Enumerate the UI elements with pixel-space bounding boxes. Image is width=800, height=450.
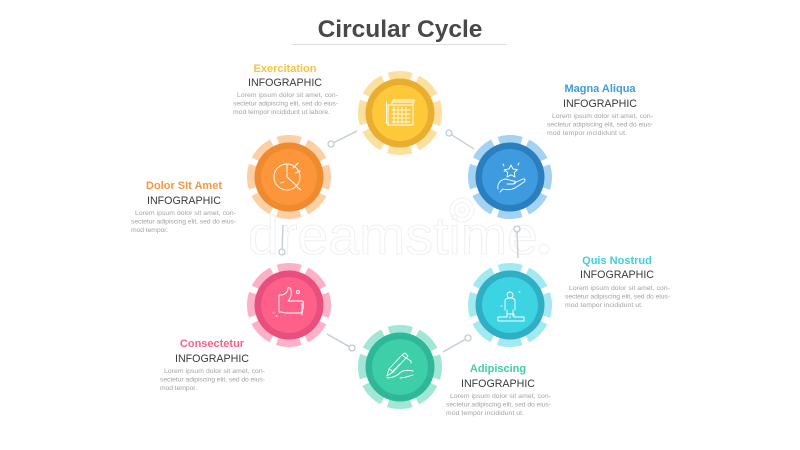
text block: Exercitation: INFOGRAPHIC — [248, 77, 322, 89]
text block: Dolor Sit Amet: Lorem ipsum dolor sit amet, con- — [135, 210, 236, 217]
text block: Consectetur: Consectetur — [180, 338, 245, 350]
text block: Adipiscing: Lorem ipsum dolor sit amet, con- — [450, 393, 551, 400]
connector: pink to mint — [327, 334, 355, 351]
text block: Adipiscing: sectetur adipiscing elit, sed do eius- — [446, 402, 551, 408]
icon: pie chart — [274, 163, 301, 190]
connector: orange to pink — [279, 225, 285, 255]
text block: Adipiscing: mod tempor incididunt ut. — [446, 410, 524, 417]
title: Circular Cycle — [318, 16, 482, 43]
text block: Quis Nostrud: sectetur adipiscing elit, sed do eius- — [565, 294, 670, 300]
text block: Quis Nostrud: Lorem ipsum dolor sit amet, con- — [569, 285, 670, 292]
icon: hand writing — [387, 353, 413, 378]
text block: Dolor Sit Amet — [131, 180, 236, 234]
text block: Adipiscing: INFOGRAPHIC — [461, 378, 535, 390]
text block: Adipiscing: Adipiscing — [470, 363, 526, 375]
connector: yellow to blue — [446, 130, 474, 149]
text block: Dolor Sit Amet: sectetur adipiscing elit, sed do eius- — [131, 218, 236, 226]
text block: Exercitation: mod tempor incididunt ut labore. — [233, 109, 330, 116]
text block: Adipiscing — [446, 363, 551, 417]
icon: thumbs up — [273, 288, 304, 316]
text block: Exercitation: Lorem ipsum dolor sit amet, con- — [237, 92, 338, 99]
gear: mint — [362, 329, 438, 405]
text block: Magna Aliqua: mod tempor incididunt ut. — [547, 130, 627, 137]
text block: Consectetur: sectetur adipiscing elit, sed do eius- — [160, 376, 265, 384]
text block: Exercitation — [233, 63, 338, 116]
text block: Magna Aliqua: INFOGRAPHIC — [563, 98, 637, 110]
text block: Quis Nostrud: Quis Nostrud — [582, 255, 652, 267]
text block: Exercitation: sectetur adipiscing elit, sed do eius- — [233, 100, 338, 108]
text block: Consectetur: INFOGRAPHIC — [175, 353, 249, 365]
text block: Dolor Sit Amet: INFOGRAPHIC — [147, 195, 221, 207]
gear: orange — [251, 139, 327, 215]
gear: yellow — [362, 75, 438, 151]
text block: Dolor Sit Amet: Dolor SIt Amet — [146, 180, 222, 192]
icon: calendar — [386, 100, 414, 125]
text block: Consectetur — [160, 338, 265, 392]
text block: Exercitation: Exercitation — [254, 63, 317, 75]
connector: blue to cyan — [514, 226, 520, 258]
text block: Dolor Sit Amet: mod tempor. — [131, 227, 168, 234]
watermark: dreamstime — [248, 206, 538, 266]
gear: pink — [251, 267, 327, 343]
text block: Quis Nostrud: mod tempor incididunt ut. — [565, 302, 643, 309]
text block: Quis Nostrud — [565, 255, 670, 309]
gear: cyan — [472, 267, 548, 343]
connector: mint to cyan — [443, 335, 471, 352]
icon: hand with star — [498, 163, 525, 192]
text block: Consectetur: Lorem ipsum dolor sit amet, con- — [164, 368, 265, 375]
connector: yellow to orange — [328, 131, 357, 147]
text block: Consectetur: mod tempor. — [160, 385, 197, 392]
gear: blue — [472, 139, 548, 215]
text block: Magna Aliqua: Magna Aliqua — [564, 83, 636, 95]
icon: person on podium — [498, 292, 524, 321]
text block: Quis Nostrud: INFOGRAPHIC — [580, 269, 654, 281]
text block: Magna Aliqua — [547, 83, 653, 137]
text block: Magna Aliqua: sectetur adipiscing elit, sed do eius- — [547, 122, 653, 128]
text block: Magna Aliqua: Lorem ipsum dolor sit amet, con- — [552, 113, 653, 120]
